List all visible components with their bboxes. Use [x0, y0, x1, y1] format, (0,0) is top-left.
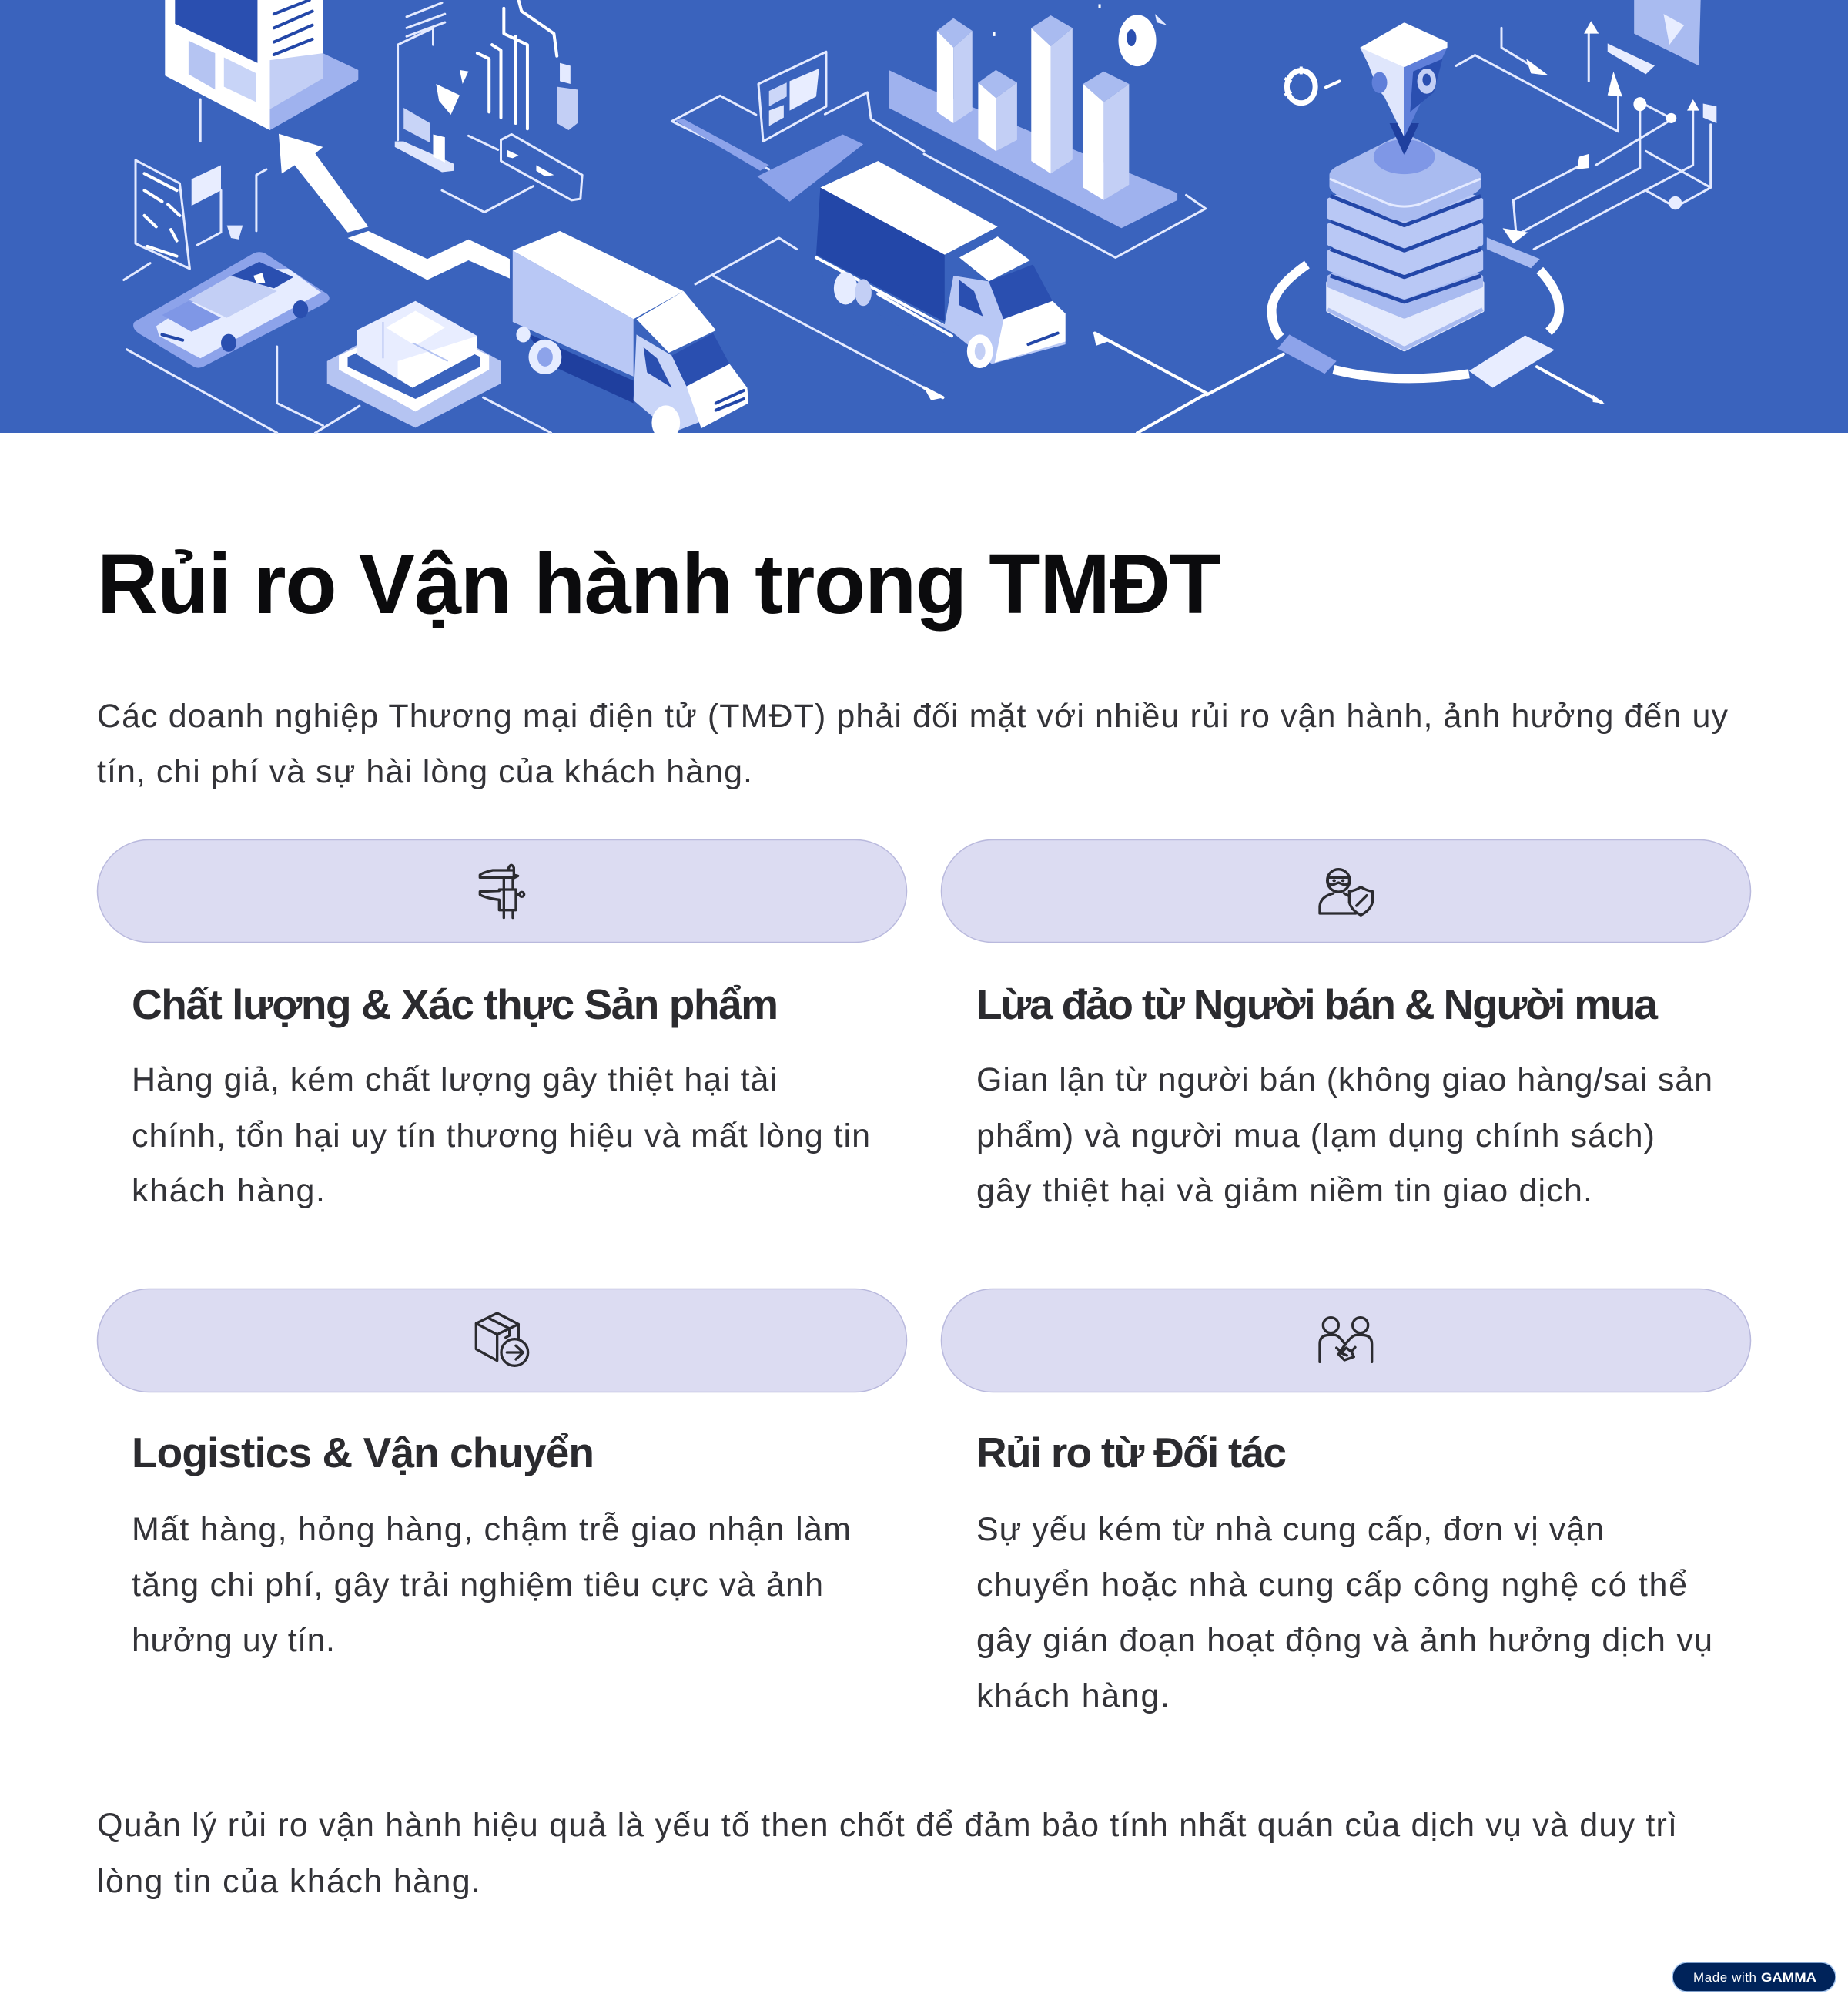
icon pill: masked person with shield: [941, 839, 1751, 943]
upper circuit lines and devices: [395, 0, 582, 213]
description: gây thiệt hại và giảm niềm tin giao dịch.: [976, 1172, 1592, 1209]
Made with Gamma badge: [1672, 1962, 1836, 1992]
panel: partner risk: [941, 1289, 1751, 1714]
description: [132, 1061, 870, 1209]
title: Rủi ro Vận hành trong TMĐT: [97, 537, 1221, 632]
icon pill: caliper: [97, 839, 907, 943]
closing paragraph: lòng tin của khách hàng.: [97, 1863, 480, 1900]
panel: fraud: [941, 839, 1751, 1209]
gear icon: [1284, 67, 1340, 108]
hero illustration: isometric e-commerce logistics scene: [0, 0, 1848, 440]
heading: Lừa đảo từ Người bán & Người mua: [976, 980, 1658, 1028]
right circuit network: [1456, 0, 1716, 250]
kiosk tower: [165, 0, 358, 142]
icon pill: two people shaking hands: [941, 1289, 1751, 1392]
description: [976, 1511, 1712, 1714]
description: [132, 1511, 851, 1659]
description: phẩm) và người mua (lạm dụng chính sách): [976, 1118, 1655, 1154]
description: Sự yếu kém từ nhà cung cấp, đơn vị vận: [976, 1511, 1604, 1548]
intro paragraph: tín, chi phí và sự hài lòng của khách hàng.: [97, 753, 752, 790]
growth arrow: [279, 134, 368, 233]
bar chart on platform: [889, 4, 1206, 257]
description: chính, tổn hại uy tín thương hiệu và mất lòng tin: [132, 1118, 870, 1154]
description: Hàng giả, kém chất lượng gây thiệt hại tài: [132, 1061, 777, 1098]
description: [976, 1061, 1712, 1209]
description: Gian lận từ người bán (không giao hàng/sai sản: [976, 1061, 1712, 1098]
icon pill: box with arrow: [97, 1289, 907, 1392]
description: gây gián đoạn hoạt động và ảnh hưởng dịch vụ: [976, 1622, 1712, 1659]
parcels on platform: [327, 301, 551, 433]
delivery truck front: [513, 231, 924, 440]
description: hưởng uy tín.: [132, 1622, 335, 1659]
description: chuyển hoặc nhà cung cấp công nghệ có thể: [976, 1567, 1687, 1604]
heading: Chất lượng & Xác thực Sản phẩm: [132, 980, 778, 1028]
panel: logistics: [97, 1289, 907, 1659]
description: khách hàng.: [132, 1172, 325, 1209]
heading: Logistics & Vận chuyển: [132, 1429, 594, 1476]
intro paragraph: Các doanh nghiệp Thương mại điện tử (TMĐT) phải đối mặt với nhiều rủi ro vận hành, ảnh hưởng đến uy: [97, 698, 1728, 735]
ring around server: [1207, 237, 1605, 404]
intro paragraph: [97, 698, 1728, 790]
closing paragraph: [97, 1807, 1677, 1900]
left clipboard panel: [124, 160, 266, 280]
closing paragraph: Quản lý rủi ro vận hành hiệu quả là yếu tố then chốt để đảm bảo tính nhất quán của dịch vụ và duy trì: [97, 1807, 1677, 1844]
heading: Rủi ro từ Đối tác: [976, 1429, 1287, 1476]
description: tăng chi phí, gây trải nghiệm tiêu cực và ảnh: [132, 1567, 823, 1604]
car on platform: [127, 252, 360, 433]
description: Mất hàng, hỏng hàng, chậm trễ giao nhận làm: [132, 1511, 851, 1548]
Made with Gamma badge: Made with: [1693, 1970, 1756, 1985]
Made with Gamma badge: GAMMA: [1761, 1970, 1816, 1985]
delivery truck back: [816, 161, 1207, 433]
panel: product quality: [97, 839, 907, 1209]
description: khách hàng.: [976, 1677, 1170, 1714]
server stack with location pin: [1327, 22, 1482, 350]
monitor and connector: [671, 52, 924, 202]
